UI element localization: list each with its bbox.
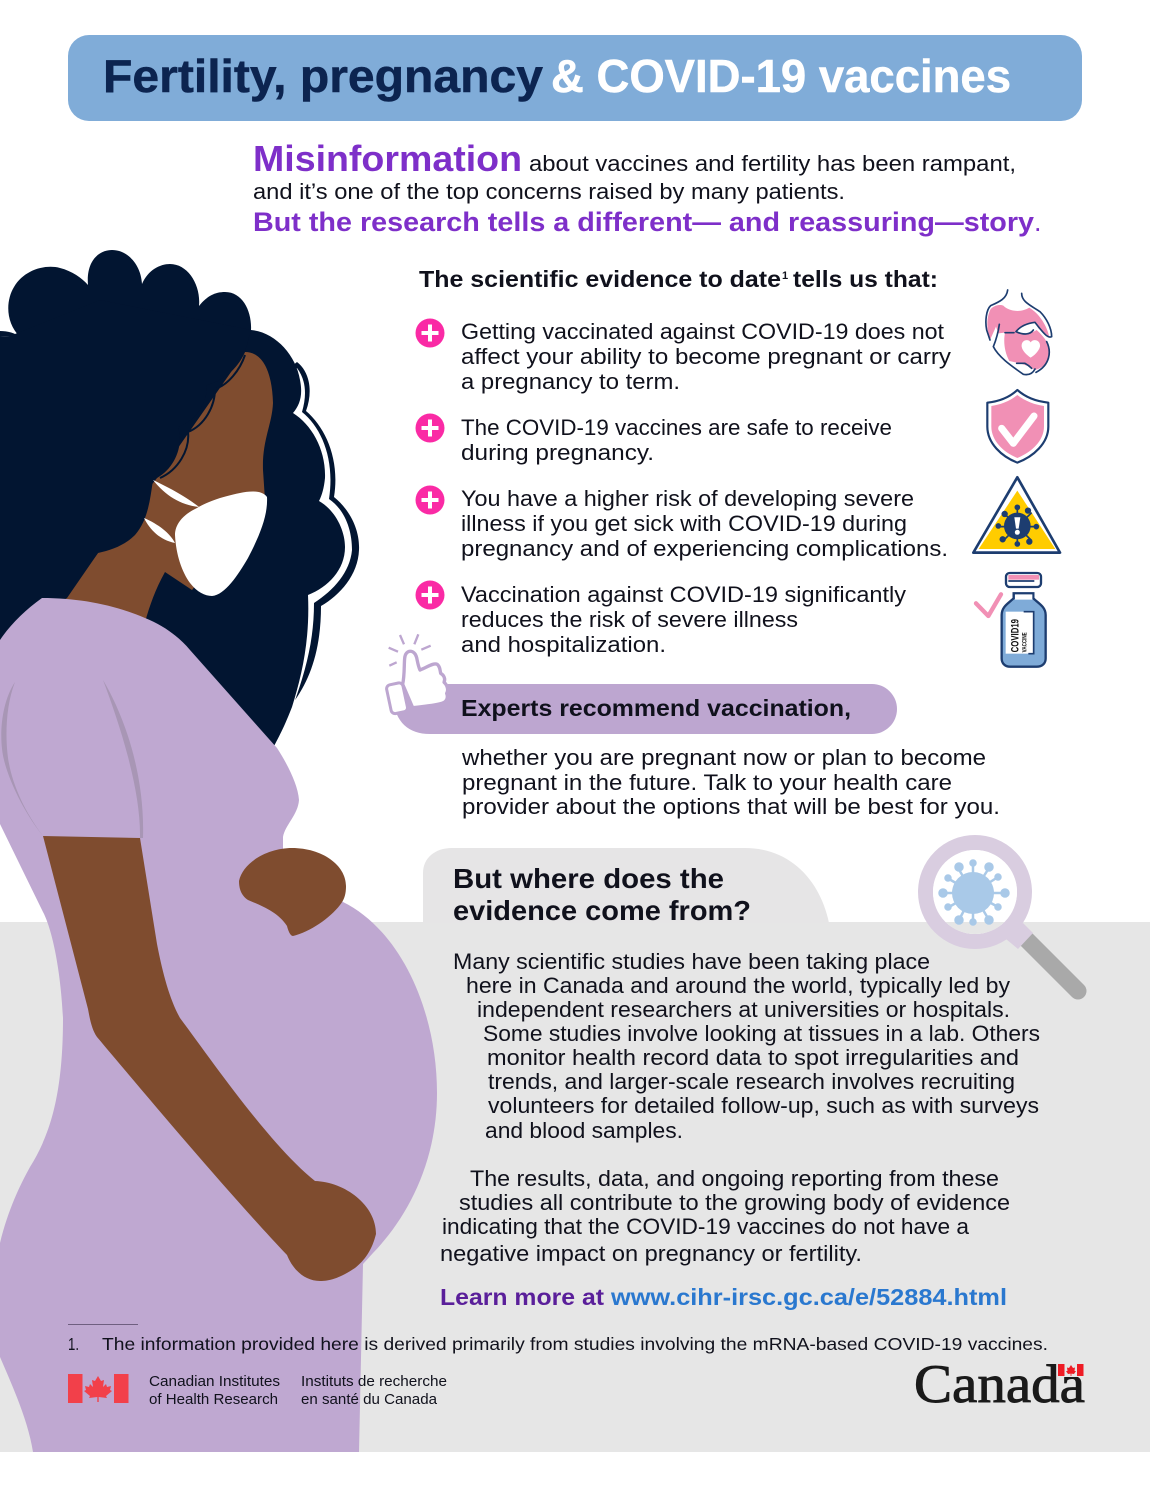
bullet 2: The COVID-19 vaccines are safe to receive [461, 415, 892, 440]
icon: plus [416, 486, 444, 514]
text: studies paragraph: here in Canada and around the world, typically led by [466, 973, 1011, 998]
bullet 2: during pregnancy. [461, 440, 654, 465]
learn more link [440, 1284, 1007, 1310]
text: studies paragraph: and blood samples. [485, 1118, 683, 1143]
bullet 3: illness if you get sick with COVID-19 during [461, 511, 907, 536]
icon: vaccine vial with check [976, 573, 1046, 667]
intro text block: But the research tells a different— and reassuring—story [253, 207, 1034, 237]
mask [175, 492, 267, 596]
callout: experts recommend vaccination: Experts recommend vaccination, [461, 695, 851, 721]
logo: Canadian Institutes of Health Research [68, 1373, 447, 1408]
bullet 2 [416, 414, 892, 465]
bullet 4: and hospitalization. [461, 632, 666, 657]
heading: where does the evidence come from: evidence come from? [453, 895, 751, 926]
icon: plus [416, 414, 444, 442]
icon: pregnant belly [986, 290, 1052, 375]
callout: experts recommend vaccination [386, 634, 897, 734]
logo: Canadian Institutes of Health Research: en santé du Canada [301, 1391, 438, 1408]
panel: grey lower background [0, 922, 1150, 1452]
heading: where does the evidence come from: But where does the [453, 863, 724, 894]
bullet 4: reduces the risk of severe illness [461, 607, 798, 632]
text: studies paragraph: Some studies involve looking at tissues in a lab. Others [483, 1021, 1040, 1046]
intro text block: about vaccines and fertility has been rampant, [529, 151, 1016, 176]
text: recommendation [461, 745, 1000, 819]
icon: plus [416, 580, 444, 610]
footnote: 1. [68, 1334, 79, 1354]
icon: vaccine vial with check: COVID19 [1009, 619, 1021, 652]
bullet 1: Getting vaccinated against COVID-19 does not [461, 319, 945, 344]
logo: Canadian Institutes of Health Research: Canadian Institutes [149, 1373, 280, 1390]
footnote: The information provided here is derived primarily from studies involving the mRNA-based COVID-19 vaccines. [102, 1334, 1048, 1354]
text: recommendation: pregnant in the future. Talk to your health care [462, 770, 952, 795]
bullet 3: pregnancy and of experiencing complications. [461, 536, 948, 561]
text: recommendation: provider about the options that will be best for you. [462, 794, 1000, 819]
text: results paragraph: indicating that the COVID-19 vaccines do not have a [442, 1214, 969, 1239]
intro text block: . [1034, 207, 1042, 237]
panel: evidence heading tab [423, 848, 829, 923]
text: studies paragraph [453, 949, 1040, 1143]
learn more link: Learn more at [440, 1284, 604, 1310]
dress [0, 598, 437, 1452]
illustration: pregnant woman in mask [0, 250, 437, 1452]
text: results paragraph: studies all contribute to the growing body of evidence [459, 1190, 1010, 1215]
bullet 1 [416, 318, 952, 394]
text: studies paragraph: independent researchers at universities or hospitals. [477, 997, 1010, 1022]
text: results paragraph: The results, data, and ongoing reporting from these [470, 1166, 999, 1191]
bullet 4: Vaccination against COVID-19 significantly [461, 582, 907, 607]
front hair [0, 300, 251, 640]
evidence heading: 1 [782, 270, 788, 282]
text: recommendation: whether you are pregnant now or plan to become [461, 745, 986, 770]
title banner [68, 35, 1082, 121]
intro text block: Misinformation [253, 138, 522, 179]
text: results paragraph: negative impact on pregnancy or fertility. [440, 1241, 862, 1266]
icon: magnifying glass with virus [926, 842, 1078, 991]
icon: vaccine vial with check: VACCINE [1022, 632, 1029, 652]
footnote [68, 1324, 1048, 1354]
icon: plus [416, 318, 444, 348]
intro text block: and it’s one of the top concerns raised by many patients. [253, 179, 845, 204]
text: studies paragraph: volunteers for detailed follow-up, such as with surveys [488, 1093, 1039, 1118]
evidence heading: The scientific evidence to date [419, 266, 781, 292]
hair [0, 250, 345, 760]
bullet 1: a pregnancy to term. [461, 369, 680, 394]
icon: thumbs up [386, 634, 448, 714]
logo: Canada wordmark: Canada [914, 1354, 1085, 1414]
text: results paragraph [440, 1166, 1010, 1266]
bullet 4 [416, 580, 907, 657]
icon: shield with check [987, 390, 1048, 463]
text: studies paragraph: monitor health record data to spot irregularities and [487, 1045, 1019, 1070]
evidence heading [419, 266, 938, 292]
title banner: & COVID-19 vaccines [551, 50, 1011, 102]
icon: warning triangle with virus [973, 477, 1060, 553]
logo: Canadian Institutes of Health Research: Instituts de recherche [301, 1373, 447, 1390]
heading: where does the evidence come from [453, 863, 751, 926]
learn more link: www.cihr-irsc.gc.ca/e/52884.html [610, 1284, 1007, 1310]
evidence heading: tells us that: [793, 266, 938, 292]
hair outline [250, 362, 359, 703]
intro text block [253, 138, 1042, 237]
arm [43, 836, 376, 1281]
face and neck [60, 352, 273, 622]
text: studies paragraph: Many scientific studies have been taking place [453, 949, 930, 974]
logo: Canadian Institutes of Health Research: of Health Research [149, 1391, 278, 1408]
title banner: Fertility, pregnancy [103, 50, 543, 102]
bullet 3: You have a higher risk of developing severe [461, 486, 914, 511]
bullet 1: affect your ability to become pregnant or carry [461, 344, 952, 369]
hand on belly [239, 848, 346, 936]
text: studies paragraph: trends, and larger-scale research involves recruiting [488, 1069, 1015, 1094]
bullet 3 [416, 486, 948, 561]
